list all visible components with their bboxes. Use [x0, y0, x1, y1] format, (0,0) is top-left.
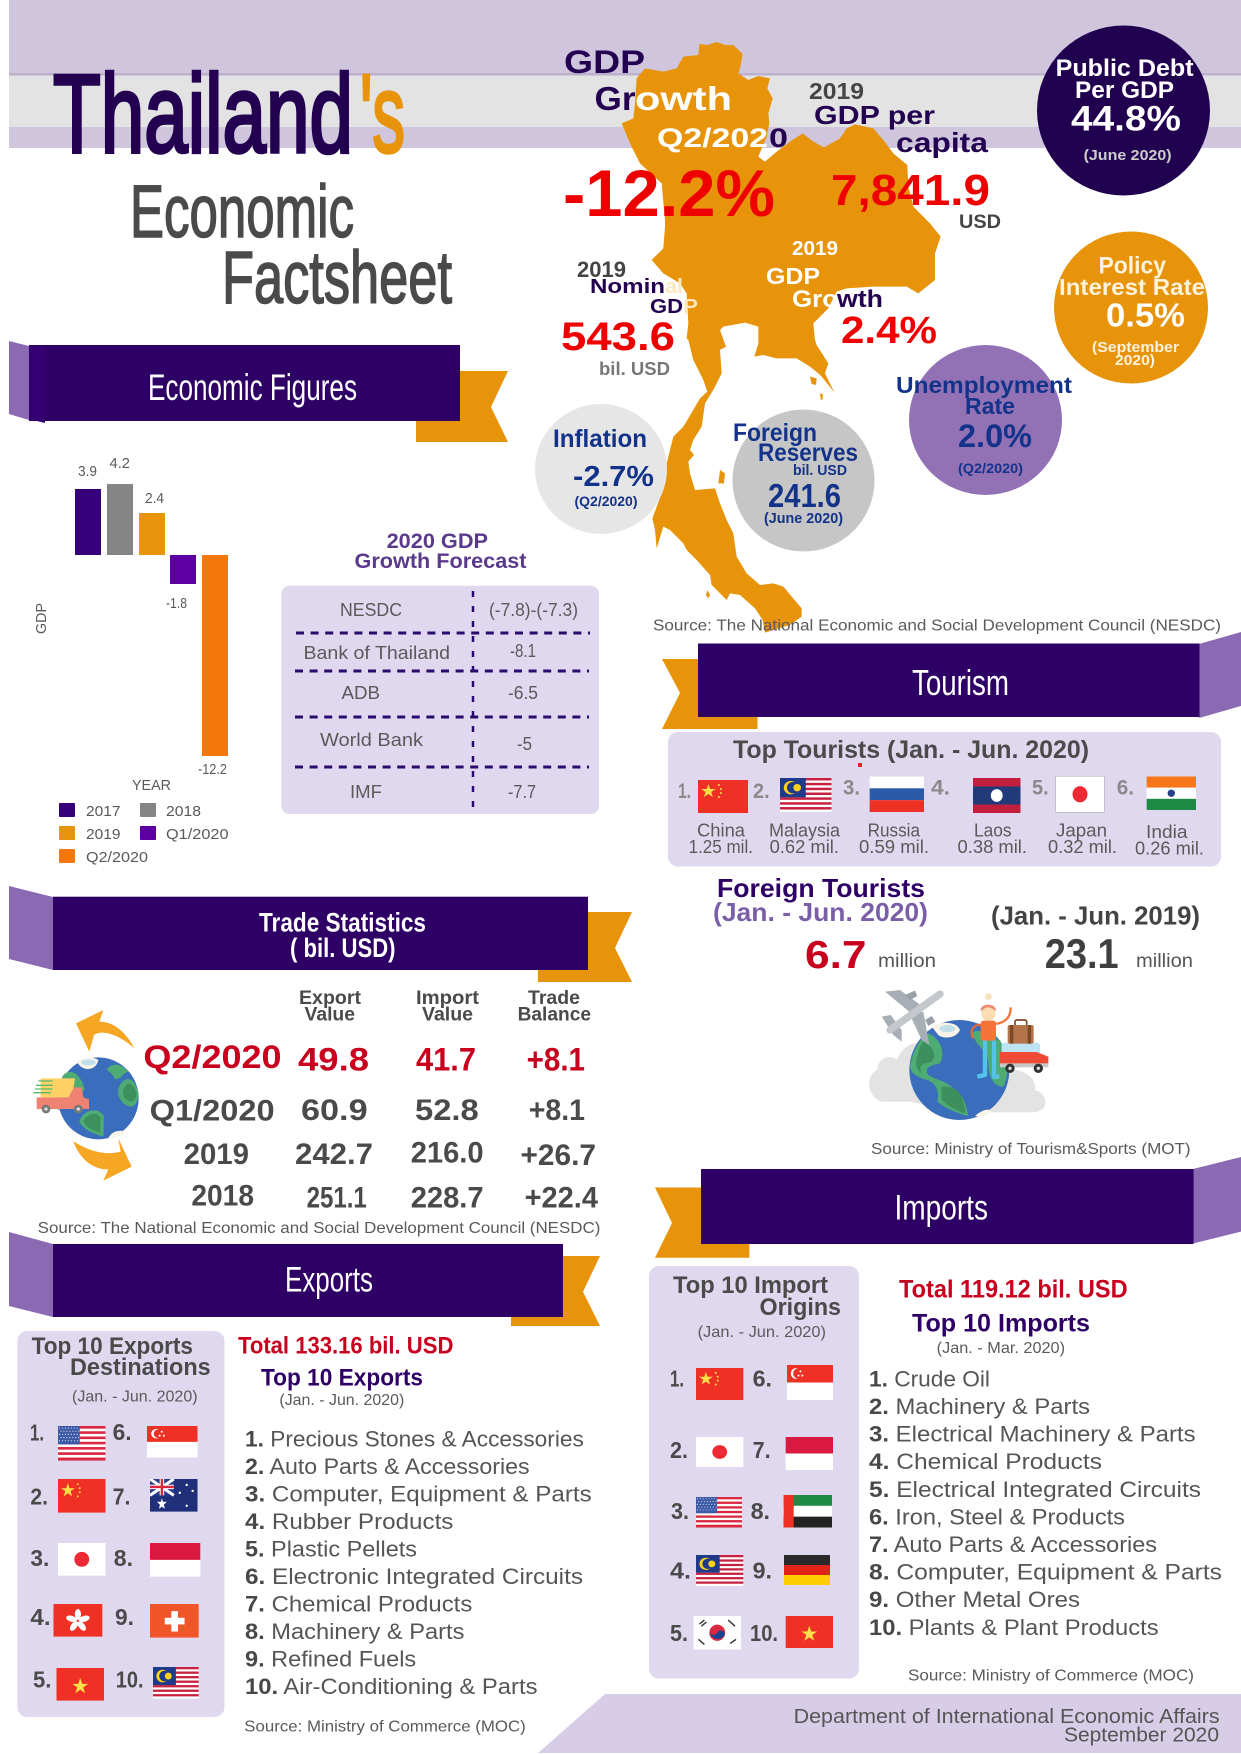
heading: GDP growth forecast	[354, 530, 526, 573]
panel: top 10 export destinations: 8.	[114, 1545, 133, 1571]
list: top 10 exports: 9. Refined Fuels	[245, 1647, 416, 1672]
banner: imports	[655, 1157, 1241, 1258]
panel: top tourists: China	[697, 820, 746, 840]
list: top 10 exports: 1. Precious Stones & Accessories	[245, 1427, 584, 1452]
circle: inflation: (Q2/2020)	[574, 493, 638, 509]
panel: forecast table: -7.7	[508, 782, 536, 802]
stat: Q2 GDP growth: -12.2%	[563, 156, 775, 230]
table: trade statistics: Value	[304, 1005, 355, 1026]
circle: public debt: Per GDP	[1075, 77, 1174, 104]
bar chart: GDP: YEAR	[132, 777, 171, 794]
table: trade statistics: Export	[299, 988, 362, 1009]
stat: GDP per capita: USD	[959, 212, 1001, 233]
banner: exports	[9, 1232, 600, 1326]
stat: 2019 GDP growth	[766, 238, 937, 352]
heading: top 10 imports: (Jan. - Mar. 2020)	[937, 1340, 1065, 1357]
banner: exports: Exports	[285, 1261, 373, 1300]
stat: nominal GDP: al	[665, 276, 683, 298]
circle: foreign reserves	[732, 410, 874, 552]
icon: globe with truck and arrows	[33, 1010, 139, 1181]
table: trade statistics: Balance	[518, 1005, 591, 1026]
circle: foreign reserves: Reserves	[758, 439, 858, 467]
footer: September 2020	[1064, 1725, 1219, 1747]
stat: Q2 GDP growth: owth	[635, 80, 732, 117]
bar chart: GDP: GDP	[33, 603, 50, 634]
stat: 2019 GDP growth: wth	[836, 286, 883, 313]
panel: forecast table: -5	[517, 734, 532, 754]
circle: foreign reserves: (June 2020)	[764, 510, 843, 527]
stat: Q2 GDP growth: GDP	[564, 44, 645, 80]
table: trade statistics: 2019	[184, 1138, 249, 1171]
table: trade statistics: Q2/2020	[143, 1039, 282, 1075]
source: NESDC map: Source: The National Economic and Social Development Council (NESDC)	[653, 618, 1221, 635]
banner: tourism	[662, 632, 1241, 729]
table: trade statistics: +8.1	[527, 1042, 585, 1078]
table: trade statistics: Q1/2020	[150, 1095, 275, 1128]
panel: top 10 export destinations: 1.	[30, 1420, 44, 1446]
panel: forecast table: NESDC	[340, 600, 402, 620]
table: trade statistics: 60.9	[301, 1094, 368, 1127]
circle: policy interest rate	[1054, 232, 1208, 384]
list: top 10 imports: 2. Machinery & Parts	[869, 1394, 1090, 1419]
stat: Q2 GDP growth: Q2/202	[657, 123, 768, 153]
list: top 10 exports	[245, 1427, 592, 1699]
circle: inflation: -2.7%	[573, 461, 654, 493]
stat: nominal GDP: 543.6	[561, 315, 675, 359]
table: trade statistics: 251.1	[307, 1182, 367, 1215]
panel: top tourists: Russia	[868, 820, 921, 840]
panel: forecast table: ADB	[342, 683, 380, 703]
table: trade statistics: 49.8	[298, 1042, 369, 1078]
source: tourism: Source: Ministry of Tourism&Sports (MOT)	[871, 1141, 1191, 1158]
stat: foreign tourists 2019: million	[1136, 951, 1193, 972]
table: trade statistics: Import	[416, 988, 480, 1009]
circle: foreign reserves: Foreign	[733, 419, 817, 447]
table: trade statistics: 2018	[191, 1180, 254, 1213]
stat: foreign tourists 2019	[991, 900, 1200, 977]
subtitle: Economic	[130, 170, 354, 253]
circle: public debt	[1037, 26, 1210, 196]
panel: top 10 import origins	[649, 1266, 859, 1679]
chart legend	[59, 803, 228, 866]
bar chart: GDP: 2.4	[145, 490, 164, 507]
circle: inflation: Inflation	[553, 425, 647, 453]
stat: nominal GDP	[561, 257, 698, 379]
circle: unemployment: Rate	[965, 393, 1015, 419]
panel: forecast table	[281, 586, 599, 814]
panel: top tourists: 0.62 mil.	[770, 837, 839, 857]
panel: forecast table: (-7.8)-(-7.3)	[489, 600, 578, 620]
map of Thailand	[622, 42, 941, 633]
circle: inflation	[535, 404, 667, 534]
stat: foreign tourists 2020	[713, 873, 936, 977]
circle: policy interest rate: (September	[1092, 339, 1179, 356]
source: trade: Source: The National Economic and Social Development Council (NESDC)	[38, 1220, 600, 1237]
banner: trade statistics: Trade Statistics	[259, 908, 426, 938]
stat: 2019 GDP growth: 2.4%	[841, 310, 937, 352]
stat: Q2 GDP growth: Gr	[594, 80, 636, 117]
panel: top 10 export destinations: 5.	[33, 1667, 51, 1693]
panel: top 10 export destinations: Top 10 Exports	[32, 1333, 193, 1360]
list: top 10 imports: 6. Iron, Steel & Products	[869, 1504, 1125, 1529]
panel: top tourists: 2.	[753, 780, 770, 803]
table: trade statistics: Trade	[528, 988, 580, 1009]
heading: top 10 exports	[261, 1365, 423, 1409]
banner: economic figures: Economic Figures	[148, 367, 357, 408]
stat: nominal GDP: P	[683, 296, 698, 318]
panel: top 10 import origins: 3.	[671, 1498, 689, 1524]
panel: top tourists: 1.25 mil.	[689, 837, 753, 857]
subtitle: Factsheet	[222, 236, 452, 319]
footer	[538, 1694, 1241, 1753]
panel: top 10 import origins: 5.	[670, 1620, 688, 1646]
list: top 10 exports: 10. Air-Conditioning & Parts	[245, 1674, 538, 1699]
table: trade statistics: 242.7	[295, 1138, 373, 1171]
list: top 10 exports: 2. Auto Parts & Accessories	[245, 1454, 530, 1479]
stat: 2019 GDP growth: 2019	[792, 238, 838, 260]
subtitle	[130, 170, 452, 319]
stat: GDP per capita: capita	[896, 127, 988, 158]
circle: unemployment: (Q2/2020)	[958, 460, 1023, 476]
heading: top 10 exports: (Jan. - Jun. 2020)	[279, 1392, 404, 1409]
panel: top tourists: Japan	[1056, 820, 1107, 840]
panel: top 10 export destinations: 4.	[30, 1604, 51, 1630]
chart legend: 2019	[86, 826, 120, 843]
heading: GDP growth forecast: Growth Forecast	[354, 550, 526, 573]
header band	[9, 0, 1241, 148]
stat: Q2 GDP growth: 0	[769, 123, 788, 153]
banner: trade statistics: ( bil. USD)	[290, 933, 396, 963]
bar chart: GDP: -1.8	[166, 595, 187, 612]
table: trade statistics: 216.0	[411, 1137, 484, 1170]
stat: nominal GDP: GD	[650, 296, 683, 318]
stat: 2019 GDP growth: Gro	[792, 286, 838, 313]
panel: forecast table: -8.1	[510, 641, 536, 661]
circle: policy interest rate: Policy	[1098, 252, 1167, 280]
table: trade statistics: Value	[422, 1005, 473, 1026]
panel: top 10 import origins: 8.	[751, 1498, 770, 1524]
source: exports: Source: Ministry of Commerce (MOC)	[244, 1719, 526, 1736]
heading: GDP growth forecast: 2020 GDP	[387, 530, 488, 553]
circle: policy interest rate: Interest Rate	[1059, 274, 1205, 300]
list: top 10 imports: 10. Plants & Plant Products	[869, 1615, 1159, 1640]
circle: public debt: (June 2020)	[1084, 147, 1172, 164]
stat: foreign tourists 2020: (Jan. - Jun. 2020)	[713, 897, 928, 927]
panel: top 10 export destinations: Destinations	[70, 1354, 211, 1381]
list: top 10 imports: 3. Electrical Machinery & Parts	[869, 1422, 1196, 1447]
stat: GDP per capita: 2019	[809, 78, 864, 104]
title: Thailand	[53, 52, 353, 176]
heading: imports total: Total 119.12 bil. USD	[899, 1276, 1128, 1304]
panel: top tourists: India	[1146, 822, 1189, 842]
panel: top 10 import origins: 7.	[753, 1437, 771, 1463]
chart legend: Q1/2020	[166, 826, 228, 843]
stat: GDP per capita: 7,841.9	[831, 166, 990, 215]
panel: top tourists: 3.	[843, 776, 860, 800]
table: trade statistics: +8.1	[529, 1094, 585, 1127]
chart legend: 2017	[86, 803, 120, 820]
circle: unemployment	[896, 345, 1072, 495]
panel: top tourists: Top Tourists (Jan. - Jun. 2020)	[733, 736, 1089, 764]
panel: top 10 export destinations	[17, 1331, 225, 1717]
panel: top tourists: 0.32 mil.	[1048, 837, 1117, 857]
heading: top 10 imports	[912, 1310, 1090, 1357]
circle: foreign reserves: bil. USD	[793, 462, 847, 479]
stat: foreign tourists 2019: 23.1	[1045, 930, 1119, 977]
circle: public debt: 44.8%	[1071, 100, 1181, 139]
panel: top tourists: 0.38 mil.	[958, 837, 1027, 857]
panel: top 10 import origins: 6.	[753, 1365, 772, 1391]
list: top 10 exports: 8. Machinery & Parts	[245, 1619, 464, 1644]
list: top 10 exports: 4. Rubber Products	[245, 1509, 453, 1534]
panel: forecast table: IMF	[350, 782, 382, 802]
table: trade statistics	[143, 988, 598, 1215]
bar chart: GDP	[33, 455, 228, 794]
circle: policy interest rate: 0.5%	[1106, 296, 1185, 334]
panel: top 10 import origins: 9.	[753, 1558, 772, 1584]
banner: trade statistics	[9, 886, 632, 982]
panel: top 10 export destinations: 2.	[30, 1484, 48, 1510]
table: trade statistics: 41.7	[416, 1042, 476, 1078]
panel: top 10 import origins: Top 10 Import	[673, 1272, 828, 1299]
panel: top tourists: Laos	[974, 820, 1012, 840]
list: top 10 imports: 7. Auto Parts & Accessories	[869, 1532, 1157, 1557]
circle: unemployment: Unemployment	[896, 372, 1072, 398]
list: top 10 imports: 1. Crude Oil	[869, 1366, 990, 1391]
stat: foreign tourists 2020: Foreign Tourists	[717, 873, 925, 903]
banner: economic figures	[9, 341, 508, 442]
panel: top 10 import origins: Origins	[760, 1294, 841, 1321]
heading: top 10 imports: Top 10 Imports	[912, 1310, 1090, 1338]
source: imports: Source: Ministry of Commerce (MOC)	[908, 1668, 1194, 1684]
list: top 10 imports	[869, 1366, 1222, 1640]
stat: foreign tourists 2020: million	[878, 951, 936, 972]
stat: Q2 GDP growth	[563, 44, 788, 230]
stat: foreign tourists 2019: (Jan. - Jun. 2019)	[991, 900, 1200, 930]
panel: top tourists: 6.	[1117, 776, 1134, 800]
table: trade statistics: 228.7	[411, 1182, 484, 1215]
bar chart: GDP: -12.2	[198, 761, 227, 778]
panel: forecast table: World Bank	[320, 730, 424, 750]
table: trade statistics: 52.8	[415, 1094, 479, 1127]
list: top 10 imports: 9. Other Metal Ores	[869, 1587, 1080, 1612]
chart legend: 2018	[166, 803, 201, 820]
panel: top 10 import origins: 10.	[750, 1620, 778, 1646]
list: top 10 imports: 8. Computer, Equipment & Parts	[869, 1560, 1222, 1585]
table: trade statistics: +26.7	[520, 1139, 596, 1172]
list: top 10 imports: 4. Chemical Products	[869, 1449, 1102, 1474]
list: top 10 imports: 5. Electrical Integrated Circuits	[869, 1477, 1201, 1502]
panel: top 10 export destinations: 10.	[116, 1667, 144, 1693]
circle: unemployment: 2.0%	[958, 418, 1032, 454]
footer: Department of International Economic Affairs	[794, 1706, 1220, 1728]
heading: exports total: Total 133.16 bil. USD	[238, 1332, 453, 1359]
list: top 10 exports: 5. Plastic Pellets	[245, 1537, 417, 1562]
circle: public debt: Public Debt	[1056, 55, 1194, 82]
bar chart: GDP: 4.2	[110, 455, 130, 472]
title: 's	[360, 52, 405, 176]
stat: GDP per capita	[809, 78, 1001, 233]
panel: top tourists: 5.	[1032, 776, 1049, 800]
panel: top 10 import origins: 4.	[670, 1558, 691, 1584]
stat: nominal GDP: Nomin	[590, 276, 665, 298]
panel: top 10 import origins: (Jan. - Jun. 2020)	[698, 1324, 826, 1341]
list: top 10 exports: 7. Chemical Products	[245, 1592, 472, 1617]
heading: top 10 exports: Top 10 Exports	[261, 1365, 423, 1392]
circle: foreign reserves: 241.6	[768, 477, 841, 514]
circle: policy interest rate: 2020)	[1115, 352, 1155, 369]
chart legend: Q2/2020	[86, 849, 148, 866]
stat: nominal GDP: 2019	[577, 257, 626, 282]
stat: 2019 GDP growth: GDP	[766, 263, 820, 289]
banner: tourism: Tourism	[912, 662, 1009, 703]
stat: foreign tourists 2020: 6.7	[805, 934, 866, 977]
panel: top 10 export destinations: 7.	[113, 1484, 130, 1510]
icon: globe with traveller	[869, 990, 1048, 1120]
list: top 10 exports: 6. Electronic Integrated Circuits	[245, 1564, 583, 1589]
panel: top 10 import origins: 2.	[670, 1437, 688, 1463]
panel: top tourists	[668, 732, 1221, 866]
panel: top tourists: 4.	[931, 776, 950, 800]
panel: top tourists: 0.59 mil.	[859, 837, 929, 857]
panel: top 10 export destinations: 9.	[115, 1604, 134, 1630]
banner: imports: Imports	[894, 1189, 988, 1228]
panel: top tourists: Malaysia	[769, 820, 841, 840]
panel: top tourists: 1.	[678, 780, 691, 803]
table: trade statistics: +22.4	[525, 1182, 598, 1215]
panel: top 10 export destinations: 6.	[113, 1419, 132, 1445]
panel: top 10 import origins: 1.	[670, 1365, 684, 1391]
stat: GDP per capita: GDP per	[814, 100, 935, 130]
panel: top tourists: 0.26 mil.	[1135, 838, 1204, 858]
bar chart: GDP: 3.9	[78, 463, 97, 480]
stat: nominal GDP: bil. USD	[599, 359, 670, 379]
panel: top 10 export destinations: 3.	[30, 1545, 49, 1571]
panel: top 10 export destinations: (Jan. - Jun. 2020)	[72, 1389, 198, 1406]
panel: forecast table: -6.5	[508, 683, 538, 703]
panel: forecast table: Bank of Thailand	[304, 643, 450, 663]
list: top 10 exports: 3. Computer, Equipment & Parts	[245, 1482, 592, 1507]
